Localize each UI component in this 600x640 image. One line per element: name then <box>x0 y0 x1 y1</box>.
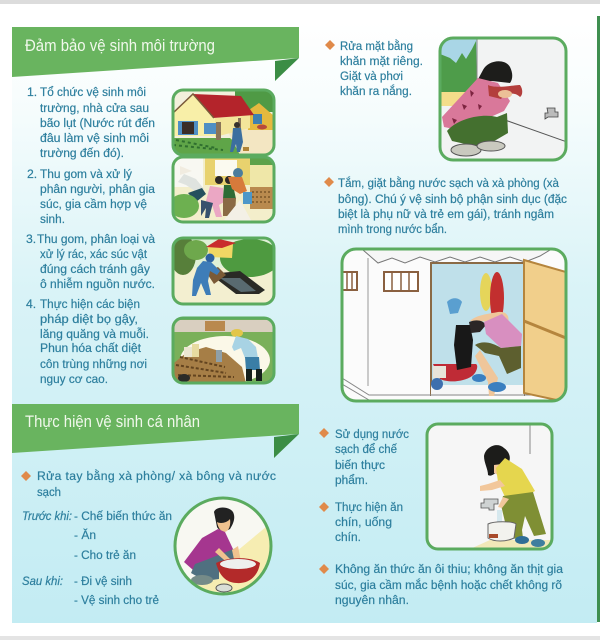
food hygiene text: chín, uống <box>335 515 392 529</box>
food hygiene text: biến thực <box>335 458 385 472</box>
illustration: collecting waste <box>169 157 274 222</box>
bathing text: biệt là phụ nữ và trẻ em gái), tránh ngâm <box>338 207 554 221</box>
numbered list of environmental measures: 4. <box>26 297 36 311</box>
heading banner: environmental hygiene <box>12 27 299 81</box>
numbered list of environmental measures: súc, gia cầm hợp vệ <box>40 197 147 211</box>
food hygiene text: phẩm. <box>335 473 368 487</box>
numbered list of environmental measures: lăng quăng và muỗi. <box>40 326 149 341</box>
illustration: burying garbage <box>170 235 280 304</box>
numbered list of environmental measures: Phun hóa chất diệt <box>40 341 142 355</box>
panel: face washing <box>325 38 567 160</box>
illustration: woman washing face <box>440 38 567 160</box>
heading banner: personal hygiene: Thực hiện vệ sinh cá nhân <box>25 413 200 431</box>
illustration: cleaning a house <box>173 90 275 155</box>
hand washing text: sạch <box>37 485 61 499</box>
face washing text <box>325 38 423 98</box>
numbered list of environmental measures: Thực hiện các biện <box>40 297 140 311</box>
food hygiene text: nguyên nhân. <box>335 593 409 607</box>
bathing text: Tắm, giặt bằng nước sạch và xà phòng (xà <box>338 175 559 190</box>
numbered list of environmental measures: phân người, phân gia <box>40 182 155 196</box>
numbered list of environmental measures: 2. <box>27 167 37 181</box>
face washing text: Rửa mặt bằng <box>340 38 413 53</box>
food hygiene text: sạch để chế <box>335 442 397 456</box>
numbered list of environmental measures: ô nhiễm nguồn nước. <box>40 276 155 291</box>
face washing text: khăn ra nắng. <box>340 83 412 98</box>
numbered list of environmental measures: Thu gom và xử lý <box>40 167 133 181</box>
food hygiene text: súc, gia cầm mắc bệnh hoặc chết không rõ <box>335 577 562 592</box>
food hygiene text: chín. <box>335 530 361 544</box>
panel: personal hygiene <box>12 404 299 607</box>
food hygiene text: Thực hiện ăn <box>335 500 403 514</box>
hand washing text: - Đi vệ sinh <box>74 574 132 588</box>
food hygiene text <box>319 427 563 607</box>
face washing text: khăn mặt riêng. <box>340 54 423 68</box>
panel: environmental hygiene <box>12 27 299 386</box>
illustration: spraying insecticide <box>173 318 274 384</box>
numbered list of environmental measures: Thu gom, phân loại và <box>37 232 155 246</box>
numbered list of environmental measures: trường đến đó). <box>40 146 124 160</box>
hand washing text: - Vệ sinh cho trẻ <box>74 593 159 607</box>
illustration: woman washing food at tap <box>427 424 552 549</box>
heading banner: environmental hygiene: Đảm bảo vệ sinh môi trường <box>25 37 215 55</box>
hand washing text: - Cho trẻ ăn <box>74 548 136 562</box>
numbered list of environmental measures: nguy cơ cao. <box>40 372 108 386</box>
numbered list of environmental measures <box>26 85 155 386</box>
bathing text <box>324 175 567 236</box>
hand washing text: Sau khi: <box>22 574 63 588</box>
panel: food hygiene <box>319 424 563 607</box>
hand washing text: Rửa tay bằng xà phòng/ xà bông và nước <box>37 468 276 483</box>
hand washing text <box>21 468 276 607</box>
bathing text: bông). Chú ý vệ sinh bộ phận sinh dục (đặc <box>338 192 567 206</box>
numbered list of environmental measures: 1. <box>27 85 37 99</box>
numbered list of environmental measures: pháp diệt bọ gậy, <box>40 312 138 326</box>
numbered list of environmental measures: trường, nhà cửa sau <box>40 101 149 115</box>
hand washing text: - Ăn <box>74 527 96 542</box>
heading banner: personal hygiene <box>12 404 299 458</box>
hand washing text: Trước khi: <box>22 509 72 523</box>
numbered list of environmental measures: đâu làm vệ sinh môi <box>40 131 149 145</box>
numbered list of environmental measures: côn trùng những nơi <box>40 357 147 371</box>
illustration: boy washing hands <box>174 497 272 595</box>
food hygiene text: Không ăn thức ăn ôi thiu; không ăn thịt gia <box>335 562 563 576</box>
hand washing text: - Chế biến thức ăn <box>74 509 172 523</box>
bathing text: mình trong nước bẩn. <box>338 222 447 236</box>
face washing text: Giặt và phơi <box>340 69 403 83</box>
illustration: woman washing hair in bathroom <box>342 249 566 402</box>
food hygiene text: Sử dụng nước <box>335 427 409 441</box>
numbered list of environmental measures: sinh. <box>40 212 65 226</box>
numbered list of environmental measures: xử lý rác, xác súc vật <box>40 247 148 261</box>
numbered list of environmental measures: bão lụt (Nước rút đến <box>40 116 155 130</box>
numbered list of environmental measures: 3. <box>26 232 36 246</box>
panel: bathing <box>324 175 567 402</box>
numbered list of environmental measures: Tổ chức vệ sinh môi <box>40 85 146 99</box>
numbered list of environmental measures: đúng cách tránh gây <box>40 262 151 276</box>
